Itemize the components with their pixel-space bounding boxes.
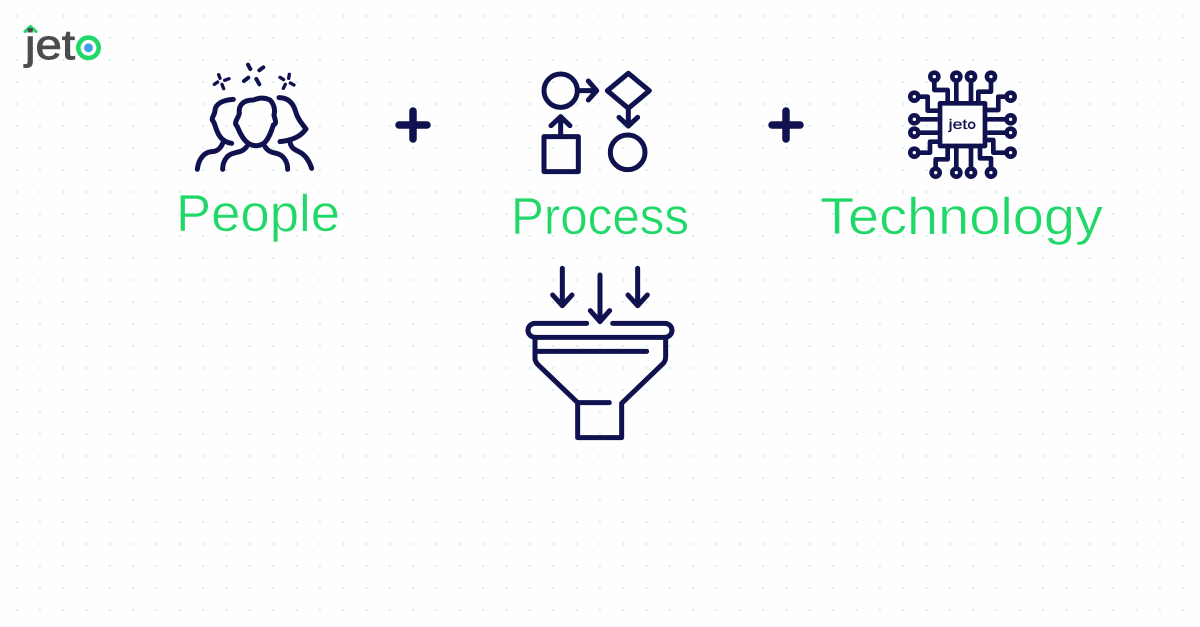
icon: technology chip: jet (947, 116, 967, 132)
heading: Technology: Technology (820, 188, 1103, 246)
heading: People: People (176, 185, 340, 243)
icon: plus (772, 111, 800, 139)
icon: process flow (544, 73, 649, 172)
heading: Process: Process (511, 188, 689, 246)
icon: people (197, 65, 312, 169)
logo: jeto: jet (23, 21, 75, 68)
icon: technology chip (910, 73, 1015, 177)
logo: jeto (23, 21, 99, 68)
icon: plus (399, 111, 427, 139)
icon: funnel with arrows (528, 268, 672, 438)
